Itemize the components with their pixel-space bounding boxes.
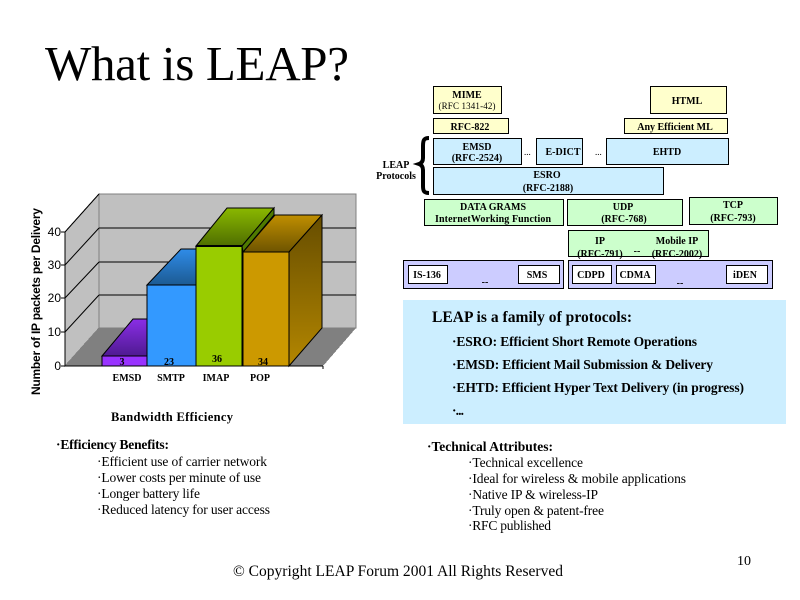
bearer group: IS-136 to SMS (404, 260, 564, 288)
brace: LEAP protocols (419, 138, 429, 193)
x axis category labels: EMSD (113, 373, 141, 384)
text block: efficiency benefits: ·Efficient use of carrier network (97, 454, 267, 469)
y axis tick labels: 10 (48, 325, 61, 339)
bearer group: CDPD to iDEN (568, 260, 772, 289)
bar: IMAP 36: 36 (212, 354, 222, 365)
box: TCP: TCP (723, 200, 743, 211)
text block: efficiency benefits: ·Longer battery life (97, 486, 200, 501)
chart caption: Bandwidth Efficiency (111, 410, 234, 424)
box: UDP: UDP (613, 202, 633, 213)
bearer group: CDPD to iDEN: CDPD (577, 270, 605, 281)
text block: technical attributes (427, 439, 686, 533)
protocol list (452, 334, 744, 418)
chart floor (65, 328, 356, 366)
footer copyright: © Copyright LEAP Forum 2001 All Rights Reserved (233, 563, 563, 580)
text block: technical attributes: ·Native IP & wireless-IP (468, 487, 598, 502)
bar: POP 34 (243, 215, 322, 368)
bar: EMSD 3 (102, 319, 147, 368)
box: HTML: HTML (672, 96, 703, 107)
box: ESRO: (RFC-2188) (523, 183, 573, 194)
text block: technical attributes: ·Truly open & patent-free (468, 503, 604, 518)
text block: efficiency benefits: ·Lower costs per minute of use (97, 470, 261, 485)
box: HTML (650, 86, 726, 114)
bearer group: IS-136 to SMS: SMS (527, 270, 548, 281)
text block: efficiency benefits (56, 437, 270, 517)
box: DATA GRAMS: DATA GRAMS (460, 202, 526, 213)
text block: technical attributes: ·Technical Attributes: (427, 439, 553, 454)
box: E-DICT: E-DICT (545, 147, 581, 158)
box: RFC-822: RFC-822 (451, 122, 489, 133)
page number: 10 (737, 554, 751, 569)
x axis category labels: SMTP (157, 373, 185, 384)
label: LEAP Protocols: Protocols (376, 171, 416, 182)
box: RFC-822 (434, 118, 508, 134)
box: DATA GRAMS (424, 200, 564, 226)
x axis category labels: IMAP (203, 373, 229, 384)
box: UDP: (RFC-768) (601, 214, 647, 225)
bearer group: CDPD to iDEN: iDEN (733, 270, 758, 281)
ellipsis between E-DICT and EHTD: ... (595, 147, 602, 157)
box: MIME: MIME (452, 90, 482, 101)
box: TCP (690, 198, 778, 224)
box: IP and Mobile IP: IP (595, 236, 605, 247)
text block: technical attributes: ·RFC published (468, 518, 551, 533)
box: IP and Mobile IP: Mobile IP (656, 236, 698, 247)
label: LEAP Protocols (376, 160, 416, 182)
chart: bandwidth efficiency 3D bar chart (29, 194, 356, 424)
box: EHTD (606, 138, 728, 164)
y axis tick labels: 30 (48, 258, 61, 272)
box: ESRO: ESRO (533, 170, 561, 181)
box: EMSD: (RFC-2524) (452, 153, 502, 164)
box: IP and Mobile IP: (RFC-2002) (652, 249, 702, 260)
box: Any Efficient ML: Any Efficient ML (637, 122, 713, 133)
box: DATA GRAMS: InternetWorking Function (435, 214, 551, 225)
text block: efficiency benefits: ·Reduced latency for user access (97, 502, 270, 517)
ellipsis between EMSD and E-DICT: ... (524, 147, 531, 157)
bearer group: IS-136 to SMS: IS-136 (413, 270, 441, 281)
text block: efficiency benefits: ·Efficiency Benefits: (56, 437, 169, 452)
bar: POP 34: 34 (258, 357, 268, 368)
protocol list: ·ESRO: Efficient Short Remote Operations (452, 334, 697, 349)
label: LEAP Protocols: LEAP (383, 160, 409, 171)
box: EHTD: EHTD (653, 147, 681, 158)
protocol stack diagram (376, 86, 778, 289)
bar: EMSD 3: 3 (120, 357, 124, 368)
title: What is LEAP? (45, 36, 349, 91)
box: EMSD: EMSD (463, 142, 491, 153)
bar: IMAP 36 (196, 208, 274, 366)
box: EMSD (434, 138, 522, 164)
bearer group: IS-136 to SMS: -- (482, 277, 488, 288)
panel heading: LEAP is a family of protocols: (432, 309, 632, 326)
bar: SMTP 23 (147, 249, 196, 368)
box: E-DICT (536, 138, 582, 164)
box: UDP (568, 200, 682, 226)
y axis tick labels: 40 (48, 225, 61, 239)
protocol list: ·... (452, 403, 464, 418)
chart back wall (99, 194, 356, 328)
protocol list: ·EHTD: Efficient Hyper Text Delivery (in progress) (452, 380, 744, 395)
box: IP and Mobile IP: (RFC-791) (577, 249, 623, 260)
text block: technical attributes: ·Technical excellence (468, 455, 583, 470)
bar: SMTP 23: 23 (164, 357, 174, 368)
panel: LEAP is a family of protocols (403, 300, 786, 424)
box: MIME: (RFC 1341-42) (438, 101, 496, 111)
chart left wall (65, 194, 99, 366)
box: IP and Mobile IP (568, 230, 708, 260)
x axis category labels (113, 373, 270, 384)
y axis tick labels: 20 (48, 291, 61, 305)
text block: technical attributes: ·Ideal for wireless & mobile applications (468, 471, 686, 486)
x axis category labels: POP (250, 373, 270, 384)
y axis tick labels (48, 225, 61, 373)
bearer group: CDPD to iDEN: -- (677, 278, 683, 289)
box: Any Efficient ML (624, 118, 728, 134)
bearer group: CDPD to iDEN: CDMA (619, 270, 651, 281)
box: TCP: (RFC-793) (710, 213, 756, 224)
y axis tick labels: 0 (54, 359, 61, 373)
box: ESRO (434, 168, 664, 194)
protocol list: ·EMSD: Efficient Mail Submission & Delivery (452, 357, 713, 372)
box: IP and Mobile IP: -- (634, 246, 640, 257)
box: MIME (434, 86, 502, 114)
y axis title: Number of IP packets per Delivery (29, 208, 43, 395)
